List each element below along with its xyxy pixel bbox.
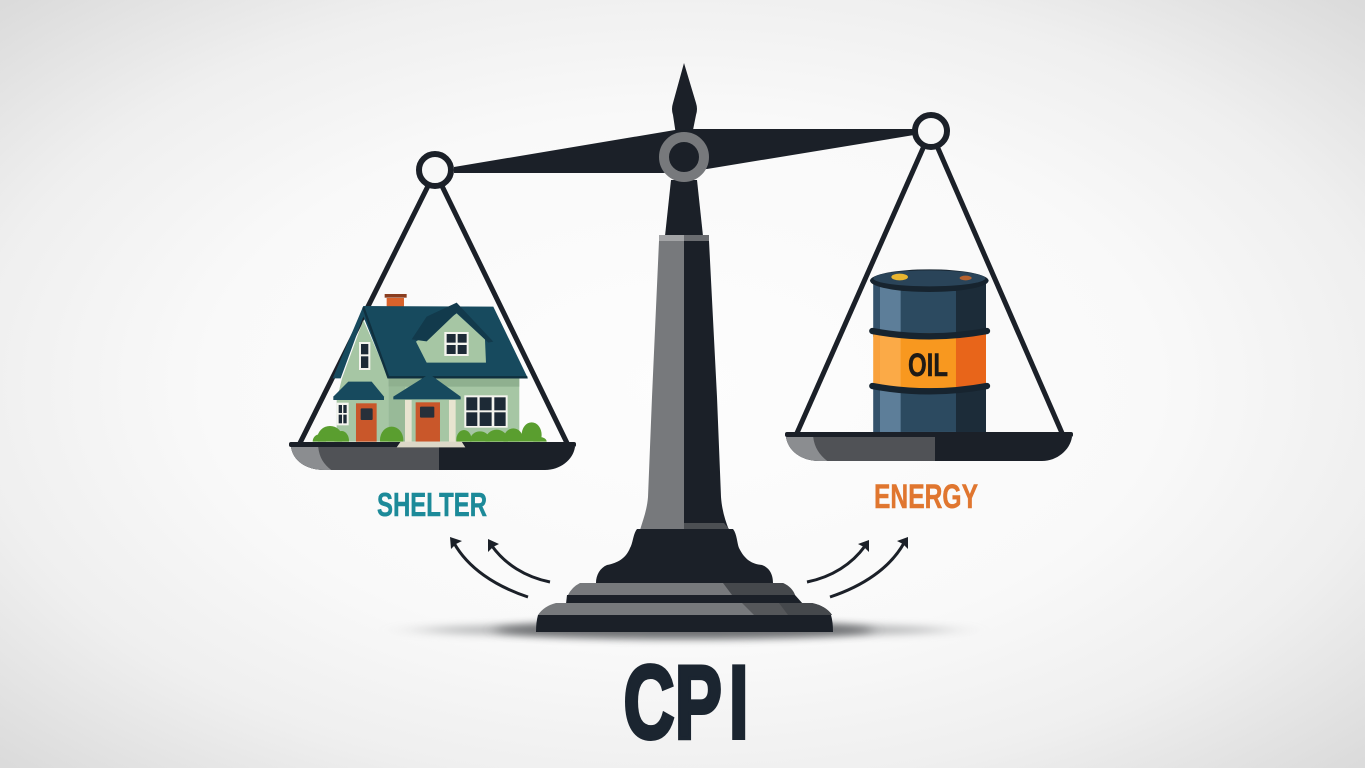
front porch roof xyxy=(393,374,461,399)
column neck xyxy=(665,180,703,236)
chimney xyxy=(385,294,407,319)
right pan xyxy=(785,432,1073,461)
pivot hub xyxy=(664,137,704,177)
dormer xyxy=(412,303,493,363)
arrows: left xyxy=(450,537,550,597)
left pan strings xyxy=(300,186,567,443)
title: CPI: CPI xyxy=(624,643,748,760)
scale xyxy=(300,63,1062,632)
icon: house xyxy=(313,294,547,453)
barrel orange band xyxy=(873,333,986,388)
barrel lid xyxy=(870,269,989,292)
porch posts xyxy=(405,400,456,442)
icon: oil barrel xyxy=(870,269,989,432)
column xyxy=(640,235,729,530)
barrel label: OIL xyxy=(908,347,948,383)
label: energy: ENERGY xyxy=(874,478,978,516)
right ring xyxy=(915,115,947,147)
side porch roof xyxy=(333,382,384,400)
side window xyxy=(337,403,349,425)
barrel lower section xyxy=(873,383,986,432)
barrel upper section xyxy=(873,280,986,337)
beam xyxy=(454,129,914,173)
gable window xyxy=(359,342,370,370)
house walls xyxy=(337,320,519,442)
main roof xyxy=(333,306,528,378)
top spike xyxy=(672,63,697,135)
left ring xyxy=(419,154,451,186)
ground shadow xyxy=(419,621,949,639)
right pan strings xyxy=(797,146,1062,433)
left pan xyxy=(289,442,576,470)
porch step xyxy=(397,442,465,447)
arrows: right xyxy=(807,537,908,597)
barrel rings xyxy=(872,331,987,391)
label: shelter: SHELTER xyxy=(377,486,487,523)
base xyxy=(536,529,833,632)
bushes xyxy=(312,422,547,442)
center door xyxy=(416,402,440,442)
left door xyxy=(356,403,377,442)
large window xyxy=(464,395,508,428)
